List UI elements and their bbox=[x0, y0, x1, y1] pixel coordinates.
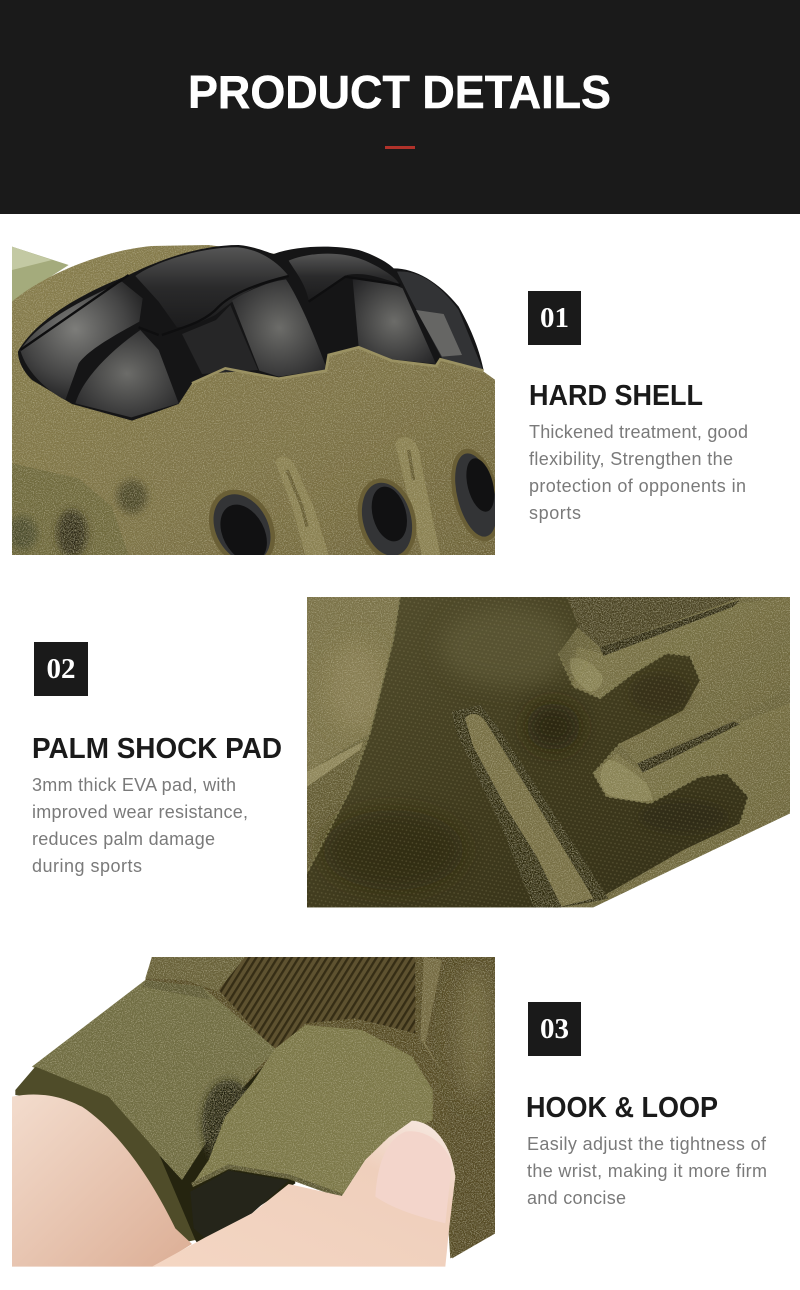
panel: palm shock pad text bbox=[32, 642, 282, 876]
mesh underside bbox=[190, 1171, 289, 1238]
wrist skin bbox=[12, 1094, 192, 1267]
heading: hard shell: HARD SHELL bbox=[529, 380, 703, 412]
velcro strap bbox=[32, 980, 277, 1180]
strap shadow backing bbox=[159, 1066, 296, 1242]
number badge 01: 01 bbox=[540, 302, 569, 334]
description: hook and loop: and concise bbox=[527, 1188, 626, 1208]
velcro flap bbox=[192, 1025, 433, 1196]
number badge 01 bbox=[528, 291, 581, 345]
header banner bbox=[0, 0, 800, 214]
description: palm shock pad: improved wear resistance, bbox=[32, 802, 248, 822]
description: hard shell bbox=[529, 422, 748, 523]
description: hook and loop: Easily adjust the tightness of bbox=[527, 1134, 767, 1154]
description: palm shock pad bbox=[32, 775, 248, 876]
number badge 02 bbox=[34, 642, 88, 696]
title: PRODUCT DETAILS bbox=[188, 66, 611, 118]
description: hook and loop: the wrist, making it more firm bbox=[527, 1161, 767, 1181]
textured palm pad bbox=[307, 597, 748, 907]
number badge 03 bbox=[528, 1002, 581, 1056]
title accent dash bbox=[385, 146, 415, 149]
photo: hook and loop wrist strap bbox=[12, 957, 495, 1267]
glove body bbox=[145, 957, 495, 1258]
panel: hard shell text bbox=[528, 291, 748, 523]
description: palm shock pad: reduces palm damage bbox=[32, 829, 215, 849]
number badge 02: 02 bbox=[46, 653, 76, 685]
description: hard shell: flexibility, Strengthen the bbox=[529, 449, 733, 469]
knuckle vent holes bbox=[196, 444, 509, 579]
heading: hook and loop: HOOK & LOOP bbox=[526, 1092, 718, 1124]
description: hard shell: sports bbox=[529, 503, 581, 523]
description: palm shock pad: during sports bbox=[32, 856, 142, 876]
elastic ribbing bbox=[219, 957, 415, 1052]
palm relief slot bbox=[452, 705, 608, 907]
heading: palm shock pad: PALM SHOCK PAD bbox=[32, 733, 282, 765]
photo: hard shell knuckle bbox=[12, 245, 495, 555]
panel: hook and loop text bbox=[526, 1002, 767, 1208]
fingers bbox=[152, 1121, 455, 1267]
number badge 03: 03 bbox=[540, 1013, 569, 1045]
description: hard shell: protection of opponents in bbox=[529, 476, 746, 496]
description: hard shell: Thickened treatment, good bbox=[529, 422, 748, 442]
wrist cuff edge bbox=[15, 1067, 195, 1245]
photo: palm shock pad bbox=[307, 597, 790, 907]
description: hook and loop bbox=[527, 1134, 767, 1208]
knuckle shell plates bbox=[18, 245, 484, 421]
description: palm shock pad: 3mm thick EVA pad, with bbox=[32, 775, 236, 795]
